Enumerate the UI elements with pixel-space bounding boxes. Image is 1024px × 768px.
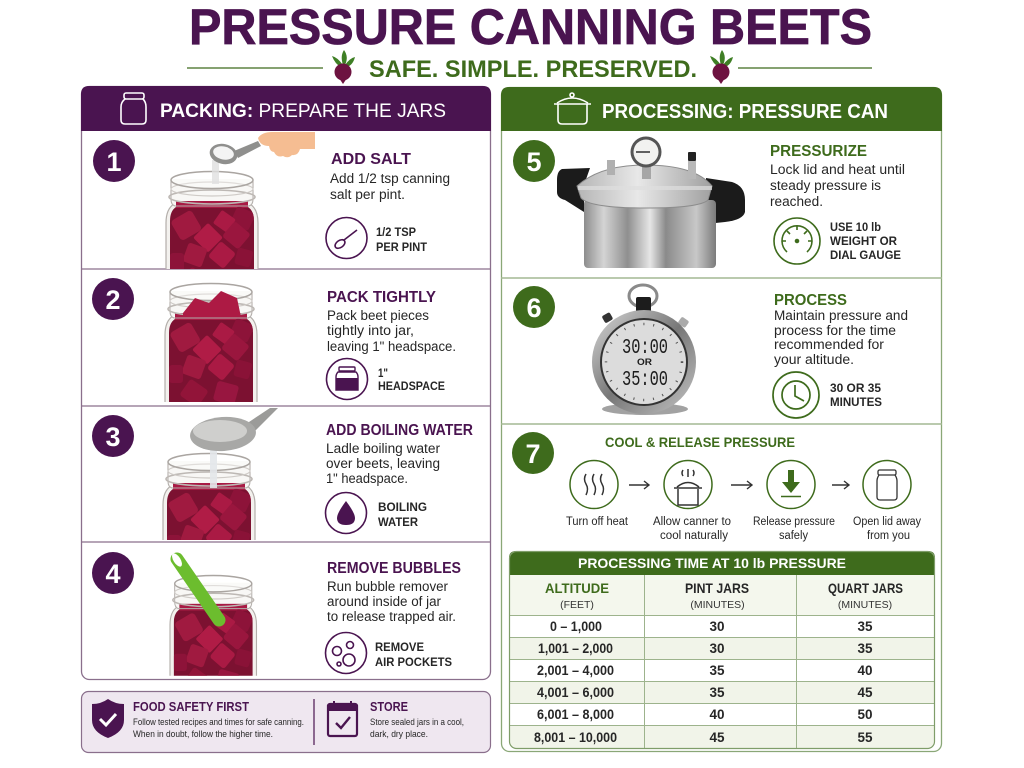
label: headspace: 1": [378, 366, 388, 380]
table rows: 30: [709, 641, 725, 656]
table rows: 4,001 – 6,000: [537, 685, 614, 700]
illustration: pressure canner: [557, 136, 745, 268]
text: store: dark, dry place.: [370, 729, 428, 740]
number 6: 6: [526, 293, 542, 323]
icon: clock: [773, 372, 819, 418]
table rows: 30: [709, 619, 725, 634]
text: pack tightly: PACK TIGHTLY: [327, 289, 436, 306]
column headers: QUART JARS: [828, 580, 903, 596]
table rows: 50: [857, 707, 873, 722]
panel: packing: [81, 86, 491, 722]
label: headspace: [378, 366, 445, 393]
number 7: [512, 432, 554, 474]
text: store: [370, 700, 464, 740]
icon: heat waves: [570, 460, 618, 508]
label: remove air pockets: REMOVE: [375, 640, 424, 654]
column headers: ALTITUDE: [545, 580, 609, 596]
text: add salt: Add 1/2 tsp canning: [330, 171, 450, 186]
label: use 10 lb: USE 10 lb: [830, 220, 881, 234]
table title: PROCESSING TIME AT 10 lb PRESSURE: [578, 555, 846, 571]
text: pressurize: [770, 143, 905, 209]
step 5: [513, 136, 905, 268]
text: food safety first: [133, 700, 304, 740]
step 7 captions: Allow canner to: [653, 516, 731, 528]
text: remove bubbles: [327, 560, 461, 624]
number 3: [92, 415, 134, 457]
step 7 captions: [566, 516, 921, 542]
packing header: [81, 86, 491, 131]
table rows: 0 – 1,000: [550, 619, 602, 634]
table rows: 2,001 – 4,000: [537, 663, 614, 678]
number 4: 4: [105, 559, 121, 589]
icon: gauge: [774, 218, 820, 264]
number 1: [93, 140, 135, 182]
subtitle banner: [187, 50, 872, 84]
icon: bubbles: [326, 632, 366, 674]
column headers: PINT JARS: [685, 580, 749, 596]
title: PRESSURE CANNING BEETS: [189, 0, 872, 55]
step 7 captions: safely: [779, 530, 808, 542]
text: pack tightly: leaving 1" headspace.: [327, 339, 456, 354]
illustration: stopwatch: 30:00: [622, 337, 668, 360]
text: food safety first: When in doubt, follow the higher time.: [133, 729, 273, 740]
text: remove bubbles: REMOVE BUBBLES: [327, 560, 461, 577]
table rows: 35: [857, 641, 873, 656]
table rows: 6,001 – 8,000: [537, 707, 614, 722]
icon: beet right: [710, 50, 733, 84]
processing header: [501, 87, 942, 131]
text: add boiling water: 1" headspace.: [326, 471, 408, 486]
table rows: 35: [857, 619, 873, 634]
illustration: packed jar: [164, 282, 258, 402]
table rows: 40: [857, 663, 873, 678]
processing header: PROCESSING: PRESSURE CAN: [602, 101, 888, 123]
text: process: [774, 292, 908, 367]
text: add salt: [330, 151, 450, 202]
subtitle banner: SAFE. SIMPLE. PRESERVED.: [369, 56, 697, 83]
number 3: 3: [105, 422, 121, 452]
table rows: 55: [857, 730, 873, 745]
illustration: jar with salt: [165, 132, 315, 269]
label: boiling water: BOILING: [378, 500, 427, 514]
text: process: your altitude.: [774, 352, 854, 367]
text: process: recommended for: [774, 337, 885, 352]
label: 1/2 tsp per pint: 1/2 TSP: [376, 225, 416, 239]
text: process: PROCESS: [774, 292, 847, 309]
label: remove air pockets: AIR POCKETS: [375, 655, 452, 669]
step 2: [92, 278, 455, 402]
text: remove bubbles: to release trapped air.: [327, 609, 456, 624]
icon: shield: [92, 699, 124, 738]
number 7: 7: [525, 439, 541, 469]
table rows: 35: [709, 663, 725, 678]
text: process: Maintain pressure and: [774, 308, 908, 323]
text: remove bubbles: Run bubble remover: [327, 579, 448, 594]
number 2: [92, 278, 134, 320]
table rows: 45: [709, 730, 725, 745]
packing header: PACKING: PREPARE THE JARS: [160, 100, 446, 122]
text: add boiling water: ADD BOILING WATER: [326, 422, 473, 439]
number 5: 5: [526, 147, 542, 177]
icon: canner cooling: [664, 460, 712, 508]
column headers: (MINUTES): [838, 599, 892, 611]
step 7 captions: Turn off heat: [566, 516, 629, 528]
label: use 10 lb: [830, 220, 901, 262]
step 7 captions: Open lid away: [853, 516, 921, 528]
text: pack tightly: [327, 289, 456, 354]
table rows: 40: [709, 707, 725, 722]
icon: spoon: [326, 218, 367, 258]
icon: open jar: [863, 460, 911, 508]
table rows: 8,001 – 10,000: [534, 730, 617, 745]
text: food safety first: FOOD SAFETY FIRST: [133, 700, 249, 714]
text: pressurize: reached.: [770, 194, 823, 209]
text: remove bubbles: around inside of jar: [327, 594, 441, 609]
illustration: stopwatch: OR: [637, 357, 652, 368]
number 1: 1: [106, 147, 122, 177]
icon: release arrow: [767, 460, 815, 508]
table rows: [534, 619, 873, 745]
number 2: 2: [105, 285, 121, 315]
text: pressurize: Lock lid and heat until: [770, 162, 905, 177]
table rows: 1,001 – 2,000: [538, 641, 613, 656]
text: add boiling water: [326, 422, 473, 486]
label: boiling water: [378, 500, 427, 529]
number 6: [513, 286, 555, 328]
step 7: [512, 432, 921, 542]
step 7 captions: Release pressure: [753, 516, 835, 528]
icon: calendar: [328, 701, 357, 736]
column headers: (FEET): [560, 599, 594, 611]
table header row backgrounds: [510, 575, 934, 748]
panel: processing: [501, 87, 942, 752]
illustration: stopwatch: 35:00: [622, 369, 668, 392]
step 7 captions: cool naturally: [660, 530, 728, 542]
text: add boiling water: Ladle boiling water: [326, 441, 441, 456]
table title: [509, 551, 935, 575]
text: food safety first: Follow tested recipes and times for safe canning.: [133, 717, 304, 728]
label: 1/2 tsp per pint: PER PINT: [376, 240, 428, 254]
step 3: [92, 408, 473, 540]
heading: cool and release: COOL & RELEASE PRESSURE: [605, 434, 795, 450]
table: processing times: [509, 551, 935, 748]
text: add salt: salt per pint.: [330, 187, 405, 202]
text: process: process for the time: [774, 323, 896, 338]
label: boiling water: WATER: [378, 515, 418, 529]
text: add boiling water: over beets, leaving: [326, 456, 440, 471]
arrow: [832, 481, 849, 489]
icon: headspace jar: [326, 358, 368, 400]
step 6: [513, 285, 908, 418]
text: pressurize: PRESSURIZE: [770, 143, 867, 160]
illustration: stopwatch: [592, 285, 696, 415]
text: store: Store sealed jars in a cool,: [370, 717, 464, 728]
label: 30 or 35 minutes: [830, 381, 882, 409]
illustration: jar with ladle: [162, 408, 278, 540]
text: add salt: ADD SALT: [331, 151, 411, 168]
step 4: [92, 552, 460, 676]
step 7 captions: from you: [867, 530, 910, 542]
column headers: [545, 580, 903, 611]
label: use 10 lb: WEIGHT OR: [830, 234, 897, 248]
text: pressurize: steady pressure is: [770, 178, 881, 193]
label: 1/2 tsp per pint: [376, 225, 428, 254]
arrow: [731, 481, 752, 489]
label: 30 or 35 minutes: 30 OR 35: [830, 381, 881, 395]
text: pack tightly: tightly into jar,: [327, 323, 414, 338]
icon: pot: [554, 93, 591, 124]
icon: water drop: [326, 492, 366, 534]
text: pack tightly: Pack beet pieces: [327, 308, 429, 323]
label: headspace: HEADSPACE: [378, 379, 445, 393]
table rows: 45: [857, 685, 873, 700]
illustration: jar with bubble remover: [169, 552, 257, 676]
label: use 10 lb: DIAL GAUGE: [830, 248, 901, 262]
column headers: (MINUTES): [690, 599, 745, 611]
icon: jar outline: [121, 93, 146, 124]
panel: food safety and store: [82, 692, 490, 752]
label: 30 or 35 minutes: MINUTES: [830, 395, 882, 409]
icon: beet left: [332, 50, 355, 84]
label: remove air pockets: [375, 640, 452, 669]
number 5: [513, 140, 555, 182]
table rows: 35: [709, 685, 725, 700]
text: store: STORE: [370, 700, 408, 714]
step 1: [93, 132, 450, 269]
number 4: [92, 552, 134, 594]
arrow: [629, 481, 649, 489]
